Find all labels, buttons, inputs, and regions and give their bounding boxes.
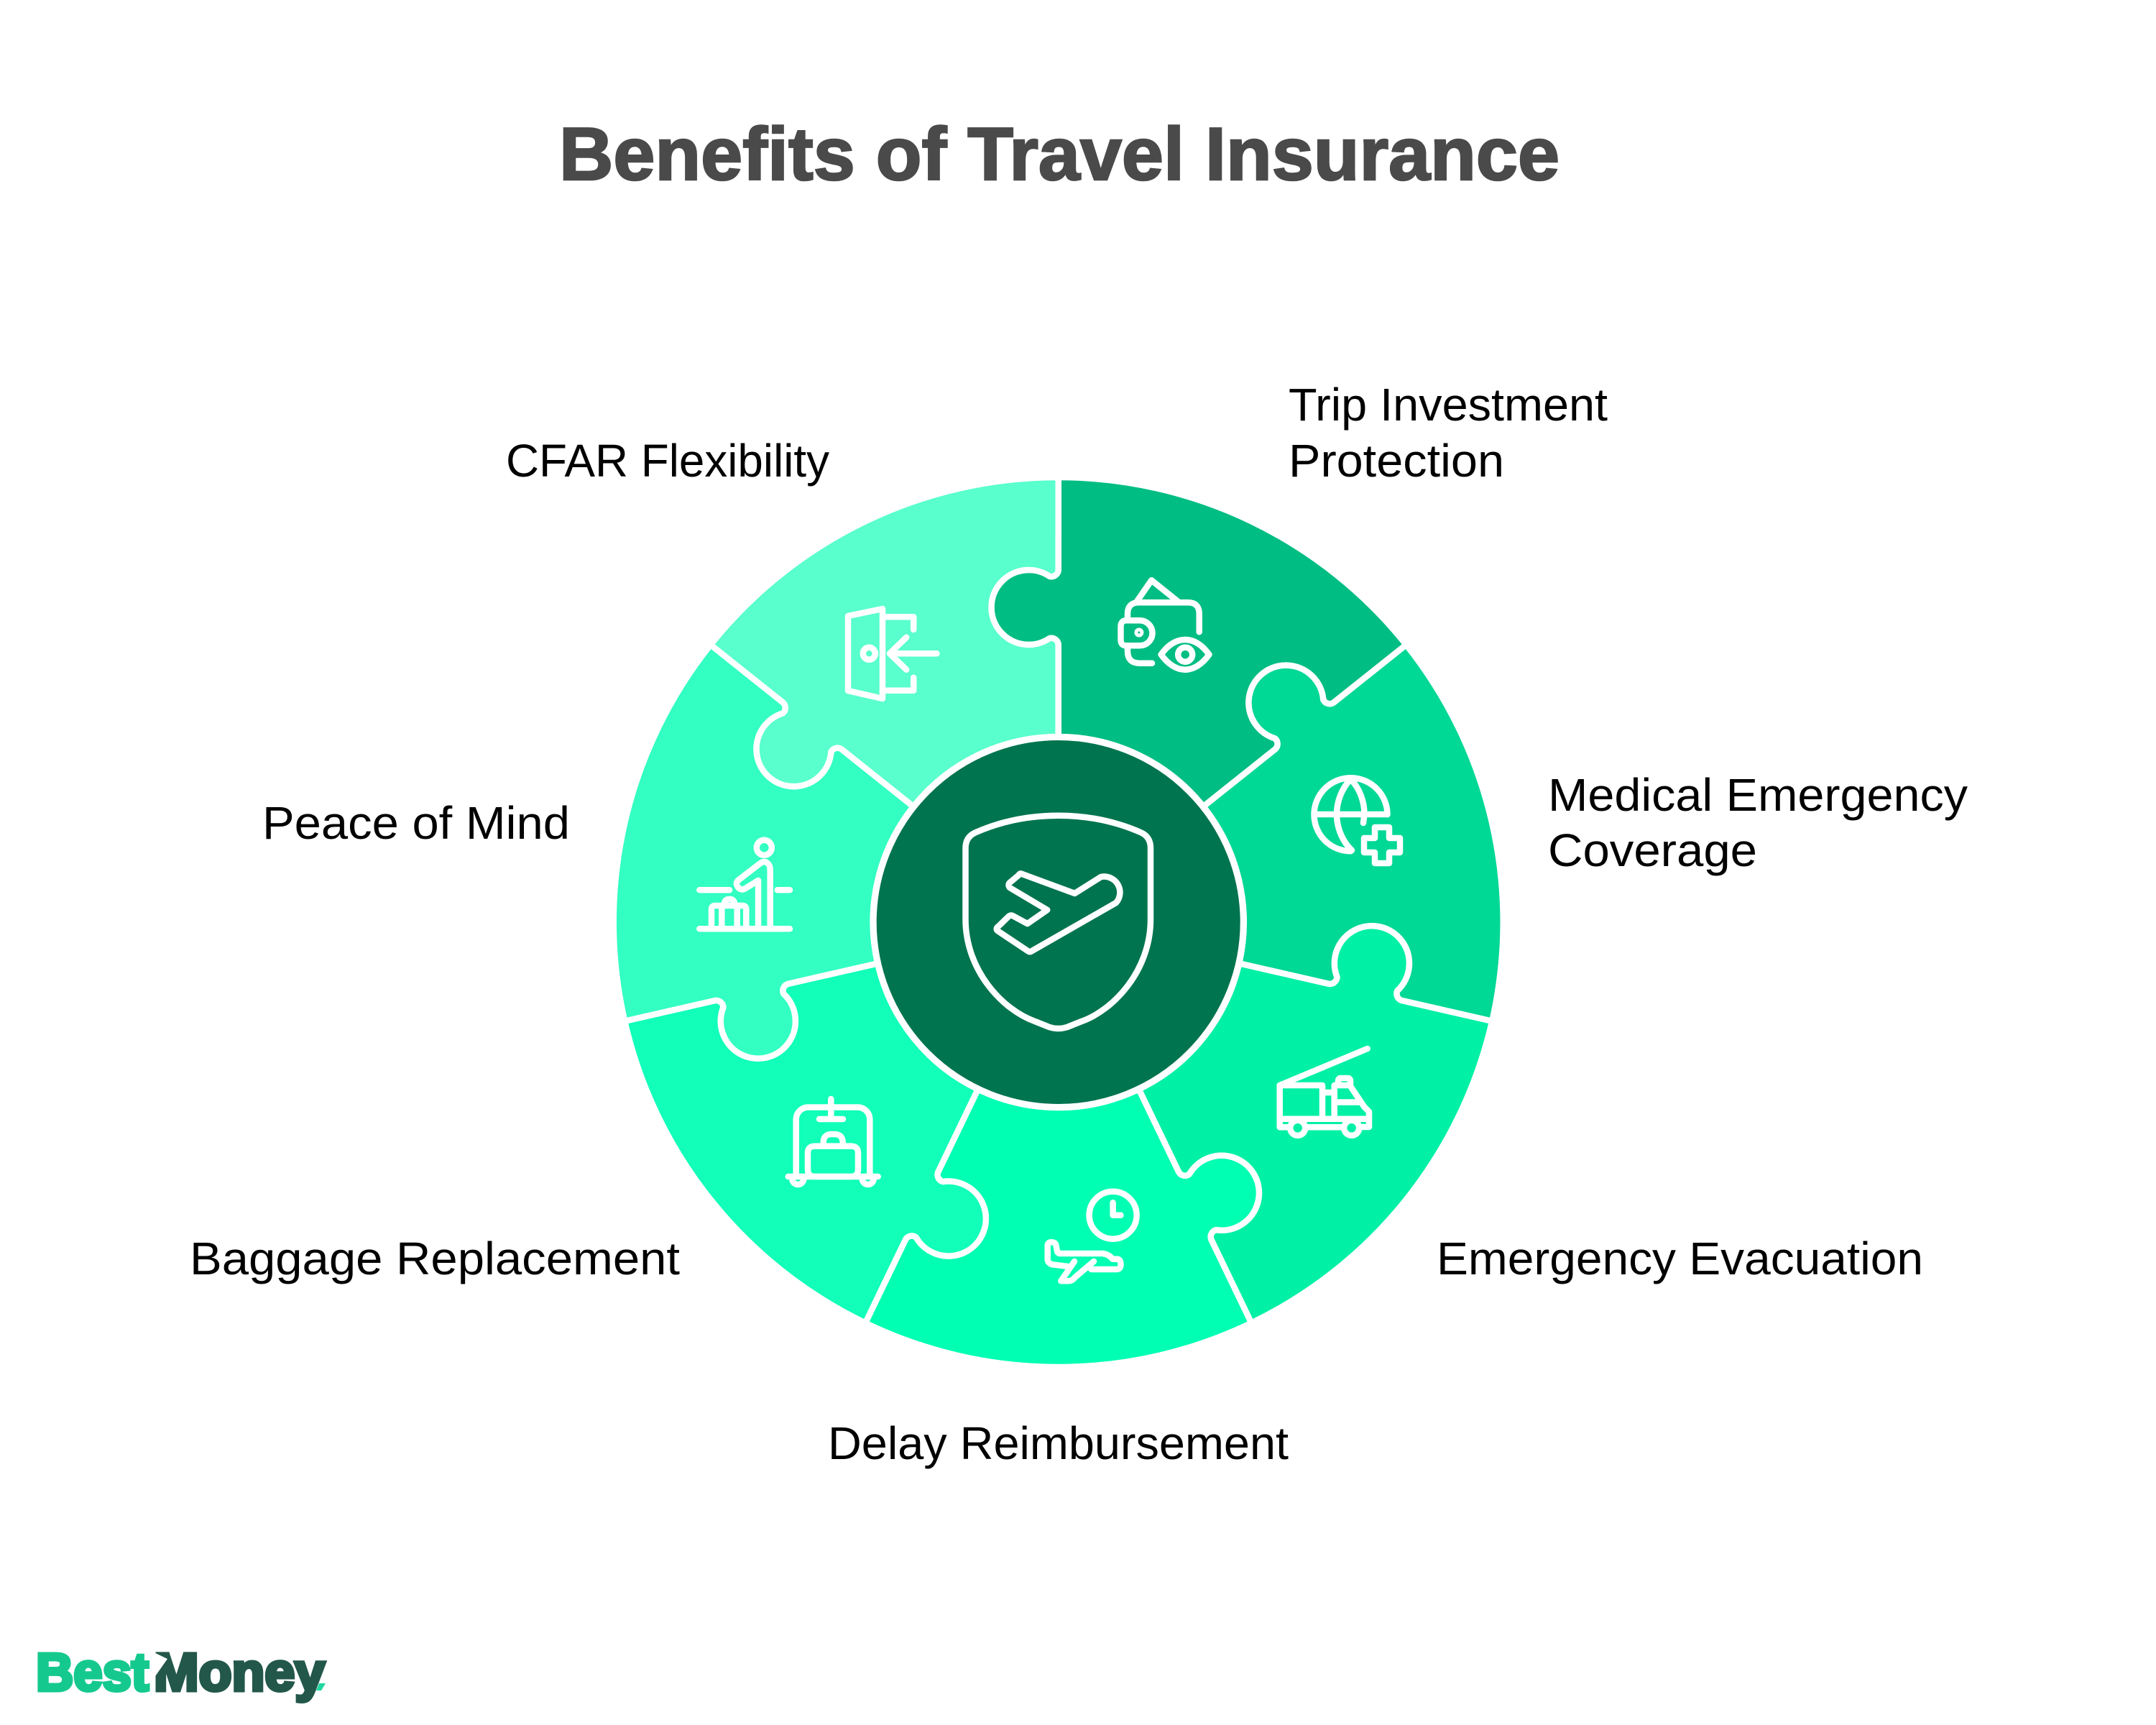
segment: Baggage Replacement [552,875,1069,1352]
label: Trip Investment Protection: Protection [1289,435,1504,487]
icon: CFAR exit door with arrow [848,609,937,699]
title: Benefits of Travel Insurance [559,113,1560,196]
segment: CFAR Flexibility [669,373,1185,903]
icon: luggage cart [788,1099,878,1184]
label: CFAR Flexibility: CFAR Flexibility [506,435,829,487]
icon: person with suitcase [699,840,790,929]
icon: shield with plane [966,816,1151,1029]
label: Medical Emergency Coverage [1548,769,1968,876]
segment: Emergency Evacuation [1094,883,1507,1361]
center hub circle [873,737,1243,1107]
segment: Delay Reimbursement [795,998,1312,1474]
label: Delay Reimbursement: Delay Reimbursement [828,1417,1289,1469]
logo: BestMoney [36,1642,326,1702]
logo: BestMoney: Best [36,1642,149,1702]
segment: Peace of Mind [548,609,961,1087]
label: Emergency Evacuation: Emergency Evacuation [1437,1233,1923,1284]
label: Trip Investment Protection [1289,379,1608,487]
label: Medical Emergency Coverage: Coverage [1548,824,1757,876]
icon: globe with medical cross [1314,778,1400,863]
label: Peace of Mind: Peace of Mind [262,797,570,849]
segment: Medical Emergency Coverage [1107,592,1623,1122]
icon: emergency truck [1280,1049,1369,1136]
label: Trip Investment Protection: Trip Investment [1289,379,1608,431]
icon: wallet with eye [1121,580,1209,670]
segment: Trip Investment Protection [991,477,1406,806]
logo: BestMoney: Money [154,1642,325,1702]
label: Baggage Replacement: Baggage Replacement [190,1233,680,1284]
icon: clock and airplane [1048,1192,1137,1281]
label: Medical Emergency Coverage: Medical Emergency [1548,769,1968,821]
puzzle wheel [548,373,1623,1474]
